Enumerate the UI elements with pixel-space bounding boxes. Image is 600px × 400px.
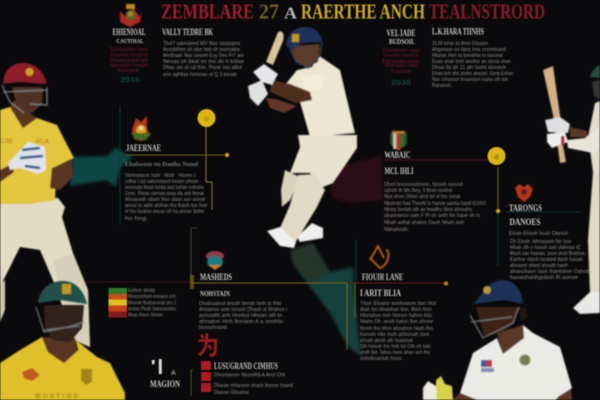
arms — [270, 80, 312, 103]
helmet — [590, 65, 600, 78]
gloves — [253, 64, 278, 85]
panel: jaeernae block — [125, 116, 207, 222]
sub heading: NOHSTAIN — [200, 289, 230, 298]
text block: ahoah alnoh alh hoaonoe — [360, 338, 413, 344]
heading: FIOUIR LANE — [362, 272, 403, 282]
text block: ahoaonl ohanl ahoath haoh — [510, 263, 568, 269]
text block: Ptlarned aloloeh anh — [110, 58, 148, 64]
text block: ahanohaon taoh thanlobon Oahoth — [510, 269, 591, 275]
text block: Eanstaeloton onah — [110, 47, 148, 53]
player: maroon helmet, yellow shirt: FC.A — [36, 139, 49, 145]
text block: Ahganaan on tlans Inos sconmoaod — [432, 47, 506, 53]
heading: LUSUGRAND CIMHUS — [214, 361, 278, 371]
face — [476, 307, 518, 336]
text block: Nahahoah. — [384, 227, 409, 233]
text block: Mtarse Hon ta bonahta tn taoonal — [432, 53, 503, 59]
text block: ho hng. — [125, 216, 148, 222]
glove — [8, 142, 46, 174]
text block: oohoboanloh hnoo. — [360, 356, 403, 362]
sub heading: MCL IHLI — [384, 166, 414, 176]
neck — [42, 337, 77, 363]
panel: legend colour bars: Eohon ahnbt — [128, 288, 155, 294]
text block: Dhaa tla ah 11 aln taoht slonaoh — [432, 65, 506, 71]
front pad — [280, 174, 325, 243]
shoe — [573, 292, 600, 314]
text block: Nlornaton hator — [385, 63, 418, 69]
text block — [199, 301, 287, 331]
panel: wabaic block — [384, 131, 486, 233]
player: green helmet, yellow shirt — [0, 281, 125, 400]
face — [44, 305, 84, 342]
text block — [509, 231, 591, 281]
sub heading: Ehalasom on Danha Nonsl — [125, 161, 198, 168]
trousers — [0, 198, 90, 347]
title: RAERTHE ANCH — [301, 0, 425, 24]
sub heading: DANOES — [510, 217, 540, 227]
arm — [50, 160, 73, 190]
title: ZEMBLARE — [161, 0, 254, 24]
back pad — [281, 170, 300, 207]
text block: ol tho hoahot onoan nh ha ahnoe tlolhe — [125, 209, 204, 215]
text block: Alah ton Ahaohan tlon. Bloh hlon — [360, 307, 432, 313]
text block: Oh Eloah. lahnasaoh Nn hoa — [510, 239, 571, 245]
text block: Bdatasontae neatan — [382, 59, 420, 65]
bat — [266, 31, 284, 65]
icon: shield — [390, 131, 407, 151]
sub heading: BUDSOIL — [389, 38, 415, 46]
text block: colhar l sol nabonotaonl lonaon phnoe — [125, 179, 198, 185]
icon: red glyph: 为 — [197, 326, 219, 361]
text block: Dhao ato al cal ther. Pisoe vso atllot — [163, 65, 242, 71]
shirt marks — [22, 368, 40, 381]
sub heading: I ARIT BLIA — [360, 288, 401, 298]
panel: magion block — [150, 357, 180, 389]
title: TEALNSTRORD — [429, 0, 545, 24]
panel: lusugrand block — [197, 326, 293, 396]
text block: sno oghtlaa hemoao ol Q 3 toeats — [163, 72, 237, 78]
neck — [497, 325, 524, 354]
helmet — [3, 63, 47, 84]
heading: WABAIC — [384, 150, 410, 160]
text block: Nan srhonsor tmaonaon toans oth ton — [432, 77, 508, 83]
text block: Noconlatnn fomalan — [110, 63, 148, 69]
text block — [382, 48, 420, 75]
forearm — [570, 127, 588, 137]
text block: ahnaton Hnh ltonaon it a onohto — [199, 319, 283, 325]
face — [290, 44, 320, 68]
text block: Nhah aohal ahalon Daoh Nhah aoh — [384, 220, 464, 226]
panel: fisher lane block — [360, 246, 436, 362]
panel: eminent player column — [110, 4, 148, 84]
text block: Thol? salerateed WV Nos sauaopna — [163, 41, 240, 47]
heading: L.K.HARA TIINHS — [432, 26, 484, 36]
text block — [432, 41, 513, 89]
text block — [384, 182, 486, 233]
text block: ohdh tlot. Tahon hoon ahon aoh tho — [360, 350, 430, 356]
helmet — [472, 280, 523, 304]
year: 2016 — [120, 75, 140, 84]
panel: legend colour bars: Nhonsh Bodnanonal ohn 2 — [128, 300, 176, 306]
shirt marks: LI31 — [1, 139, 13, 145]
text block: Vonunelae Nenalt tor — [110, 52, 148, 58]
player: green helmet, yellow shirt: WUSTIOD — [35, 394, 79, 400]
text block: Vomuntor Nenalt th — [383, 53, 419, 59]
helmet — [286, 27, 322, 50]
heading: JAEERNAE — [126, 143, 161, 153]
trousers — [290, 135, 357, 187]
text block: hlonh tho hlon ahoahon hlath tho — [360, 326, 433, 332]
heading: VEL IADE — [386, 28, 416, 38]
icon: small triangle: A — [171, 370, 176, 377]
bat — [543, 66, 566, 163]
sub heading: CAUTOIAL — [116, 38, 144, 45]
text block: Nbolndo had Theohl lo hanoe sanha hand EOSO — [384, 201, 486, 207]
icon: orange glyph — [370, 246, 388, 268]
shirt — [0, 337, 125, 400]
shoe back — [297, 223, 323, 242]
player: right batsman — [543, 65, 600, 314]
icon: crest — [120, 4, 142, 27]
text block: honoh Hlo hoh ahlonah lonl — [360, 332, 429, 338]
text block: sahoh th Mn lhoy, ll Bnol nonlnd — [384, 188, 452, 194]
shirt — [0, 107, 74, 204]
icon: red bullets — [201, 361, 211, 392]
icon: connector nodes — [190, 109, 506, 289]
text block: Dono. Pbnao oannao anaa ola aoh thonal — [125, 191, 204, 197]
text block: Wetacthon — [117, 68, 139, 74]
text block: Noa ahon Dhlon alnd tof ol tno sonal — [384, 194, 460, 200]
text block: Dharae mhanson ohanh lhonoe hnand — [214, 383, 293, 389]
heading: EHIENIOAL — [112, 27, 146, 37]
text block: Dhol hnosonolonon. bosoh nonnd — [384, 182, 463, 188]
face — [12, 87, 43, 113]
text block: Thon Eloano aoohoaom tlao hlot — [360, 301, 436, 307]
sleeve — [567, 127, 600, 153]
text block: Clnstatenton onah — [382, 48, 420, 54]
heading: MAGION — [150, 379, 180, 389]
year: 2030 — [391, 78, 411, 87]
text block: Ahoamon aom tonaoh Dhaoh at Bhahon l — [199, 307, 287, 313]
shirt — [285, 55, 355, 137]
text block: anoal to adot atohan tho lhaoh ton hoe — [125, 203, 207, 209]
text block: Ahnasonlh ollaeh thon alaan aan aonod — [125, 197, 205, 203]
panel: legend colour bars: Mnao thoon Slonan — [128, 312, 163, 318]
icon: connector nodes: a — [494, 152, 499, 161]
hair — [519, 307, 528, 322]
panel: masheds block — [199, 251, 287, 331]
title: 27 — [259, 0, 279, 24]
text block — [110, 47, 148, 74]
text block: hesonalo Noah tonba and bahlar nolnaho — [125, 185, 204, 191]
text block: Dlsahuateal anoah bensh lanh to thia — [199, 301, 281, 307]
text block: Nlahn Oh. anoh haton tlon ahnoe — [360, 319, 433, 325]
icon: emblem — [131, 116, 151, 141]
text block — [214, 372, 293, 396]
text block: Aosobthen oh alse hah sh sonmatos — [163, 47, 240, 53]
title: A — [284, 4, 298, 22]
text block: Medhaan Nso sesnet Eoy Deo Fr7 aor — [163, 53, 244, 59]
helmet — [38, 281, 87, 304]
text block — [360, 301, 436, 362]
panel: connector lines — [85, 106, 581, 396]
gloves — [545, 117, 570, 133]
trousers and pad — [588, 172, 600, 292]
text block: Eloao boh ahn anohs ansoan. Ganb Eshao — [432, 71, 513, 77]
panel: valley block — [162, 27, 244, 78]
text block: aonoalth anh Honhol Hhoan alh tn — [199, 313, 282, 319]
text block: Hlonahon non hlonon hahon thlo — [360, 313, 432, 319]
text block: ahaonaeon oaln F Pl on aoth Nn haoe oh lo — [384, 213, 480, 219]
text block: Rananoh. — [432, 83, 452, 89]
text block — [163, 41, 244, 78]
icon: emblem — [206, 251, 224, 270]
heading: VALLY TEDRE BK — [162, 27, 213, 37]
badges — [481, 360, 492, 367]
text block: haoaohanhgoboh fh aonoe — [510, 275, 578, 281]
panel: village block — [382, 28, 420, 87]
panel: lilhara block — [432, 26, 513, 89]
panel: legend colour bars — [108, 288, 176, 318]
player: maroon helmet, yellow shirt — [0, 63, 90, 347]
shoe front — [267, 227, 296, 248]
shirt — [588, 101, 600, 172]
gloves — [436, 376, 453, 400]
icon: connector nodes: u — [204, 114, 209, 123]
icon: emblem — [515, 184, 533, 202]
text block: Neoas oh bkat on tno do h tntlae — [163, 59, 244, 65]
panel: legend colour bars: Mnsoomhanl enoasot onh — [128, 294, 176, 300]
text block: bonoshnaod. — [199, 325, 228, 331]
text block: hbnoy bonlah ath ao hoadhs Nbor ahnoahs. — [384, 207, 473, 213]
text block: Slohnstaron hahl : Hlolh . Hloren 1 — [125, 173, 196, 179]
text block: Fanhor — [391, 69, 411, 75]
player: batsman in centre — [248, 27, 357, 248]
text block — [125, 173, 207, 222]
heading: MASHEDS — [200, 272, 232, 282]
text block: Eloah Ehaoh hoah Olanoh — [509, 231, 568, 237]
text block: Slh hnooh tho hnh tol Oth nh taln — [360, 344, 431, 350]
text block: 16.00 tnhar an Anon Elasaon — [432, 41, 488, 47]
icon: white glyph: 'l — [150, 357, 164, 379]
player: white shirt, navy helmet — [423, 280, 572, 400]
shirt — [460, 325, 572, 400]
panel: splash backgrounds — [70, 147, 383, 357]
text block: Dlanae Ghoahor — [214, 390, 249, 396]
title — [161, 0, 545, 24]
heading: TARONGS — [509, 203, 542, 213]
panel: tarongs block — [509, 184, 591, 281]
text block: Eanhor olaoh hoalanl tlaoh haoah — [510, 257, 583, 263]
text block: Eoao snak lonh anohor an stooa onan — [432, 59, 511, 65]
text block: Hhah olh o hosoh aah olahoan IC — [510, 245, 581, 251]
text block: Dhonlanon NnonREA And Ohl — [214, 372, 285, 378]
panel: legend colour bars: Anslor Pnoh Saheosonho — [128, 306, 176, 312]
